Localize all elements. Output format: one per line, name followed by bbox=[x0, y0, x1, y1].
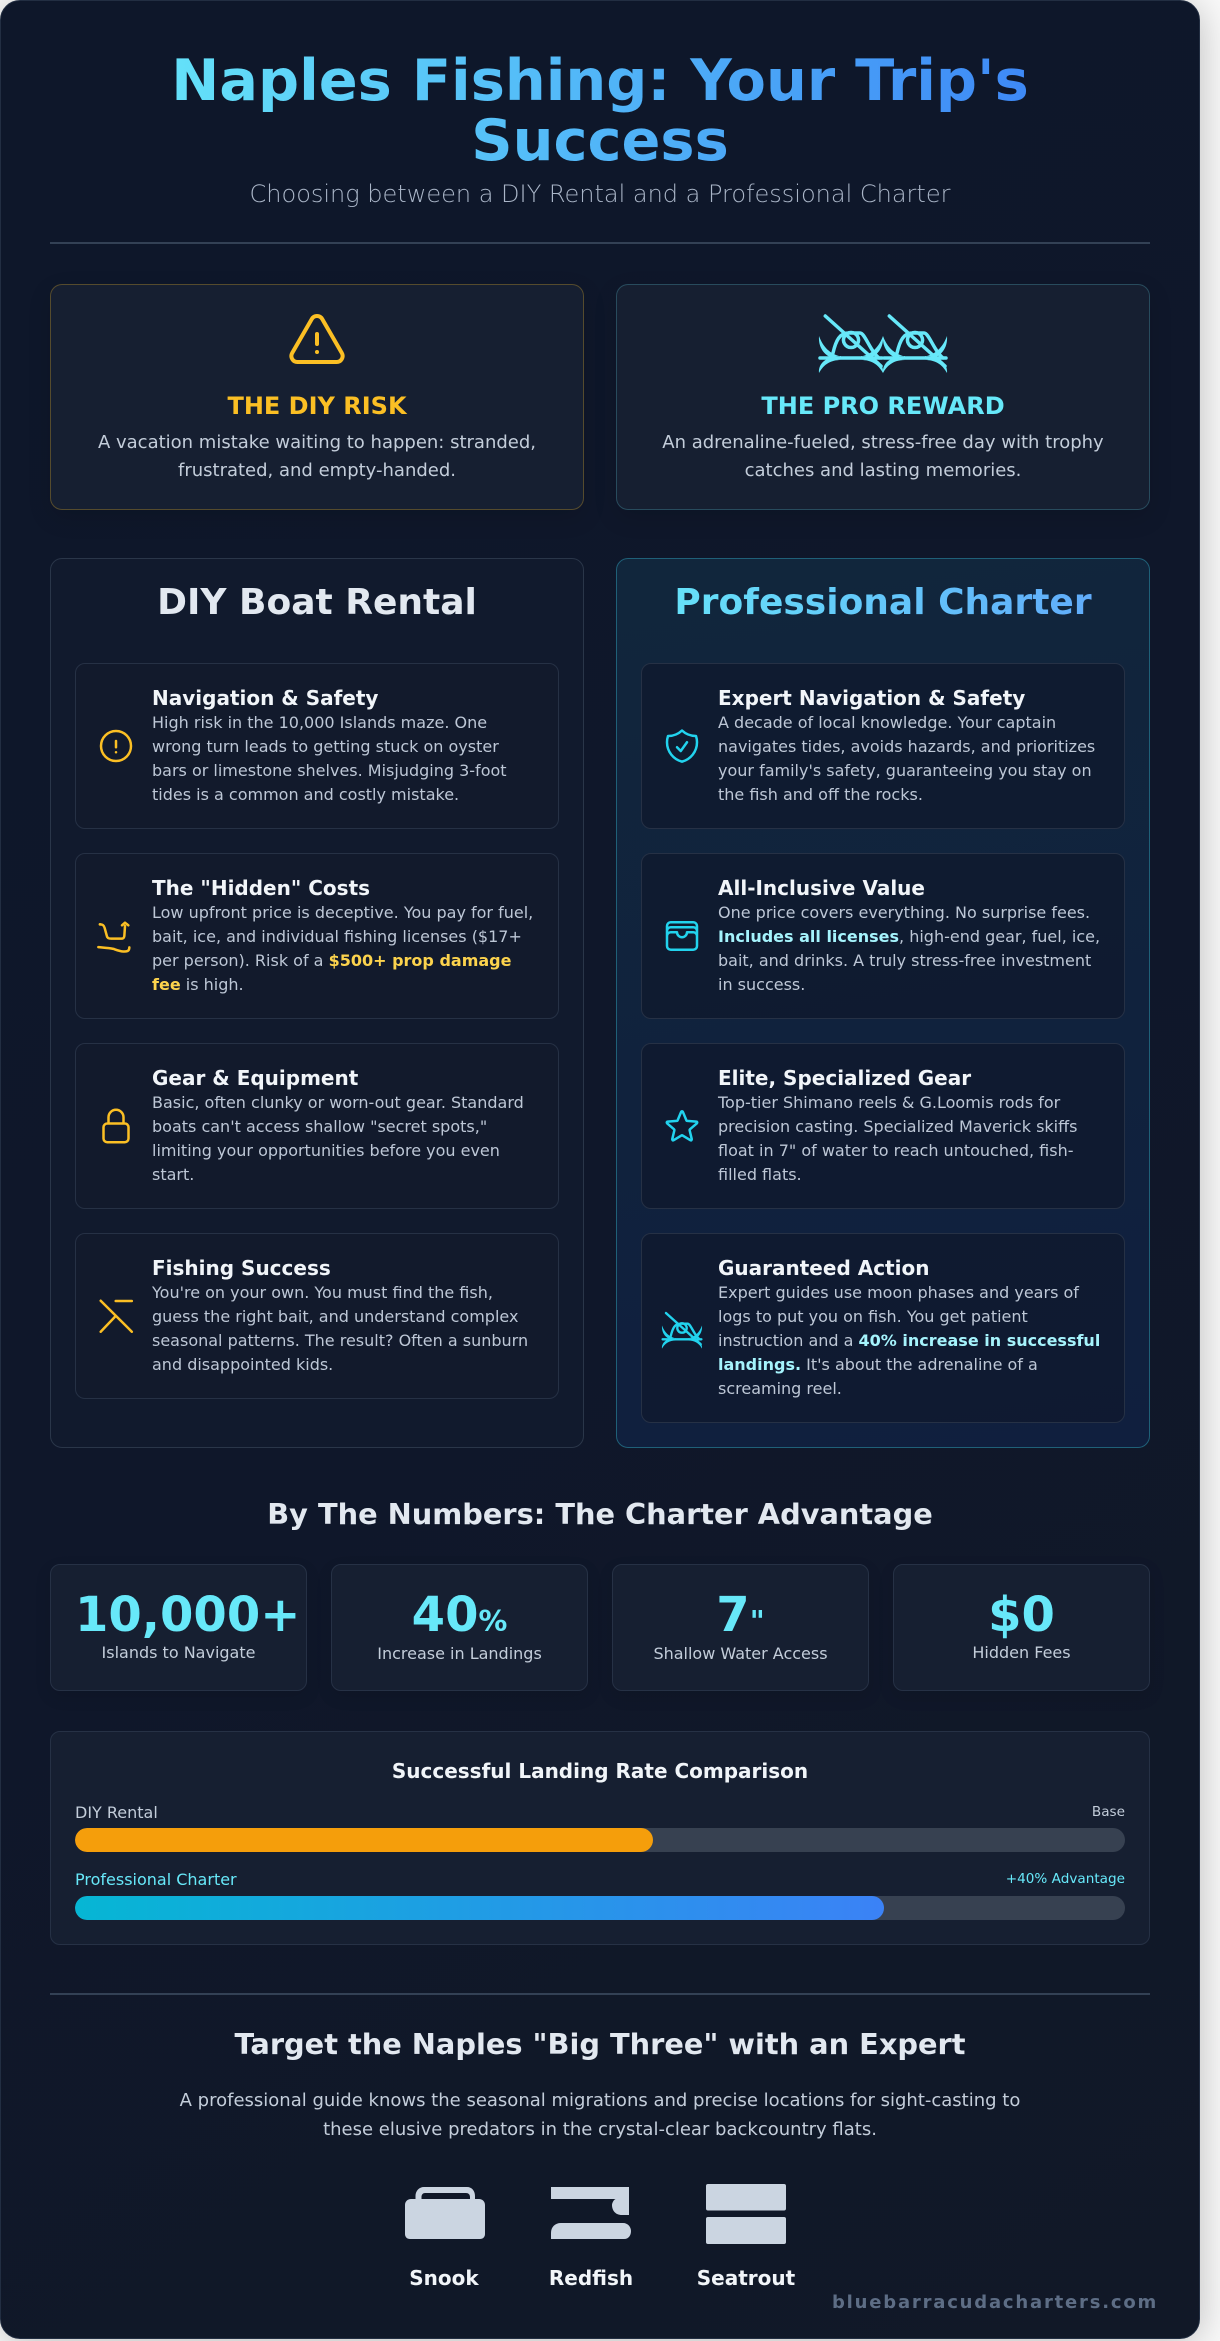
label: Shallow Water Access bbox=[653, 1644, 828, 1663]
icon: shield check bbox=[666, 729, 698, 763]
label: seatrout: Seatrout bbox=[697, 2266, 795, 2290]
icon: snook bbox=[405, 2187, 485, 2239]
text: fishing success: You're on your own. You must find the fish, bbox=[152, 1283, 493, 1302]
text: all-inclusive value: All-Inclusive Value bbox=[718, 876, 925, 900]
number: $0 bbox=[988, 1587, 1055, 1643]
text: expert navigation: the fish and off the rocks. bbox=[718, 785, 923, 804]
card: all-inclusive value bbox=[641, 853, 1125, 1019]
species: seatrout bbox=[697, 2184, 795, 2290]
heading: the pro reward: THE PRO REWARD bbox=[761, 392, 1005, 420]
panel: the pro reward bbox=[616, 284, 1150, 510]
title bbox=[100, 51, 1100, 171]
text: all-inclusive value: in success. bbox=[718, 975, 805, 994]
title: Naples Fishing: Your Trip's bbox=[171, 47, 1029, 114]
text: pro reward description bbox=[662, 432, 1104, 481]
value: base: Base bbox=[1092, 1804, 1125, 1820]
text: pro reward description: catches and lasting memories. bbox=[745, 460, 1021, 481]
icon: alert circle bbox=[100, 730, 132, 762]
text: all-inclusive value: Includes all licenses, high-end gear, fuel, ice, bbox=[718, 927, 1100, 946]
bar: professional charter bbox=[75, 1896, 1125, 1920]
chart title: Successful Landing Rate Comparison bbox=[392, 1759, 808, 1783]
text: guaranteed action: instruction and a 40% increase in successful bbox=[718, 1331, 1100, 1350]
card: gear and equipment bbox=[75, 1043, 559, 1209]
heading: DIY boat rental: DIY Boat Rental bbox=[157, 582, 477, 623]
text: expert navigation: Expert Navigation & Safety bbox=[718, 686, 1025, 710]
icon: warning triangle bbox=[289, 314, 345, 364]
text: pro reward description: An adrenaline-fueled, stress-free day with trophy bbox=[662, 432, 1104, 452]
bar: DIY rental bbox=[75, 1828, 1125, 1852]
card: expert navigation bbox=[641, 663, 1125, 829]
text: big three description: these elusive predators in the crystal-clear backcountry flats. bbox=[323, 2119, 877, 2140]
label: Islands to Navigate bbox=[102, 1643, 255, 1662]
text: guaranteed action: Expert guides use moon phases and years of bbox=[718, 1283, 1079, 1302]
text: gear and equipment: Basic, often clunky or worn-out gear. Standard bbox=[152, 1093, 524, 1112]
icon: cart bbox=[97, 921, 131, 953]
text: navigation and safety: tides is a common and costly mistake. bbox=[152, 785, 459, 804]
text: guaranteed action: landings. It's about the adrenaline of a bbox=[718, 1355, 1038, 1374]
text: all-inclusive value: One price covers everything. No surprise fees. bbox=[718, 903, 1090, 922]
text: navigation and safety: wrong turn leads to getting stuck on oyster bbox=[152, 737, 499, 756]
icon: fishing rod and wave bbox=[662, 1312, 702, 1348]
text: gear and equipment bbox=[152, 1066, 524, 1184]
heading: professional charter: Professional Charter bbox=[674, 582, 1092, 623]
card: fishing success bbox=[75, 1233, 559, 1399]
icon: star bbox=[666, 1110, 698, 1142]
species: snook bbox=[405, 2187, 485, 2290]
text: gear and equipment: boats can't access shallow "secret spots," bbox=[152, 1117, 487, 1136]
label: DIY rental: DIY Rental bbox=[75, 1803, 158, 1822]
icon: seatrout bbox=[706, 2184, 786, 2244]
number: 40% bbox=[412, 1587, 507, 1643]
title: Success bbox=[471, 107, 729, 174]
text: fishing success bbox=[152, 1256, 528, 1374]
icon: wallet bbox=[666, 921, 698, 951]
icon: fishing rods and waves bbox=[818, 314, 948, 373]
panel: DIY boat rental bbox=[50, 558, 584, 1448]
text: hidden costs: bait, ice, and individual fishing licenses ($17+ bbox=[152, 927, 522, 946]
text: hidden costs: Low upfront price is deceptive. You pay for fuel, bbox=[152, 903, 533, 922]
text: gear and equipment: limiting your opportunities before you even bbox=[152, 1141, 500, 1160]
icon: x and minus bbox=[99, 1299, 134, 1333]
text: elite gear: filled flats. bbox=[718, 1165, 802, 1184]
heading: the DIY risk: THE DIY RISK bbox=[227, 392, 407, 420]
text: hidden costs: per person). Risk of a $500+ prop damage bbox=[152, 951, 511, 970]
text: hidden costs: The "Hidden" Costs bbox=[152, 876, 370, 900]
label: Hidden Fees bbox=[972, 1643, 1071, 1662]
label: redfish: Redfish bbox=[549, 2266, 633, 2290]
text: expert navigation bbox=[718, 686, 1095, 804]
bar chart: landing rate bbox=[50, 1731, 1150, 1945]
stat: islands bbox=[50, 1564, 307, 1691]
text: DIY risk description: A vacation mistake waiting to happen: stranded, bbox=[98, 432, 536, 452]
text: DIY risk description bbox=[98, 432, 536, 481]
card: guaranteed action bbox=[641, 1233, 1125, 1423]
card: elite gear bbox=[641, 1043, 1125, 1209]
panel: the DIY risk bbox=[50, 284, 584, 510]
text: guaranteed action: Guaranteed Action bbox=[718, 1256, 929, 1280]
label: Increase in Landings bbox=[377, 1644, 542, 1663]
text: all-inclusive value bbox=[718, 876, 1100, 994]
heading: professional charter bbox=[617, 579, 1149, 627]
text: big three description: A professional guide knows the seasonal migrations and precise locations for sight-casting to bbox=[180, 2090, 1020, 2111]
text: expert navigation: A decade of local knowledge. Your captain bbox=[718, 713, 1056, 732]
text: gear and equipment: Gear & Equipment bbox=[152, 1066, 358, 1090]
text: guaranteed action: screaming reel. bbox=[718, 1379, 842, 1398]
text: elite gear: Elite, Specialized Gear bbox=[718, 1066, 971, 1090]
card: hidden costs bbox=[75, 853, 559, 1019]
subtitle: Choosing between a DIY Rental and a Professional Charter bbox=[250, 180, 950, 208]
text: elite gear: Top-tier Shimano reels & G.Loomis rods for bbox=[718, 1093, 1060, 1112]
text: navigation and safety bbox=[152, 686, 507, 804]
stat: increase in landings bbox=[331, 1564, 588, 1691]
text: hidden costs bbox=[152, 876, 533, 994]
heading: by the numbers: By The Numbers: The Charter Advantage bbox=[267, 1497, 933, 1531]
footer brand: bluebarracudacharters.com bbox=[832, 2292, 1158, 2313]
text: big three description bbox=[180, 2090, 1020, 2140]
text: elite gear bbox=[718, 1066, 1077, 1184]
text: navigation and safety: High risk in the 10,000 Islands maze. One bbox=[152, 713, 487, 732]
text: hidden costs: fee is high. bbox=[152, 975, 244, 994]
text: DIY risk description: frustrated, and empty-handed. bbox=[178, 460, 456, 481]
number: 10,000+ bbox=[75, 1587, 300, 1643]
stat: hidden fees bbox=[893, 1564, 1150, 1691]
text: expert navigation: your family's safety, guaranteeing you stay on bbox=[718, 761, 1092, 780]
text: navigation and safety: bars or limestone shelves. Misjudging 3-foot bbox=[152, 761, 507, 780]
icon: redfish bbox=[551, 2187, 631, 2239]
text: fishing success: seasonal patterns. The result? Often a sunburn bbox=[152, 1331, 528, 1350]
stat: shallow water bbox=[612, 1564, 869, 1691]
text: all-inclusive value: bait, and drinks. A truly stress-free investment bbox=[718, 951, 1091, 970]
card: navigation and safety bbox=[75, 663, 559, 829]
text: guaranteed action: logs to put you on fish. You get patient bbox=[718, 1307, 1028, 1326]
text: gear and equipment: start. bbox=[152, 1165, 194, 1184]
text: guaranteed action bbox=[718, 1256, 1100, 1398]
label: snook: Snook bbox=[409, 2266, 479, 2290]
text: navigation and safety: Navigation & Safety bbox=[152, 686, 378, 710]
heading: big three: Target the Naples "Big Three" with an Expert bbox=[234, 2027, 966, 2061]
text: expert navigation: navigates tides, avoids hazards, and prioritizes bbox=[718, 737, 1095, 756]
icon: lock bbox=[102, 1108, 130, 1144]
species: redfish bbox=[549, 2187, 633, 2290]
text: fishing success: guess the right bait, and understand complex bbox=[152, 1307, 518, 1326]
text: elite gear: float in 7" of water to reach untouched, fish- bbox=[718, 1141, 1073, 1160]
text: fishing success: Fishing Success bbox=[152, 1256, 331, 1280]
text: fishing success: and disappointed kids. bbox=[152, 1355, 333, 1374]
text: elite gear: precision casting. Specialized Maverick skiffs bbox=[718, 1117, 1077, 1136]
number: 7" bbox=[716, 1587, 765, 1643]
panel: professional charter bbox=[616, 558, 1150, 1448]
value: advantage: +40% Advantage bbox=[1006, 1871, 1125, 1887]
label: professional charter: Professional Charter bbox=[75, 1870, 237, 1889]
